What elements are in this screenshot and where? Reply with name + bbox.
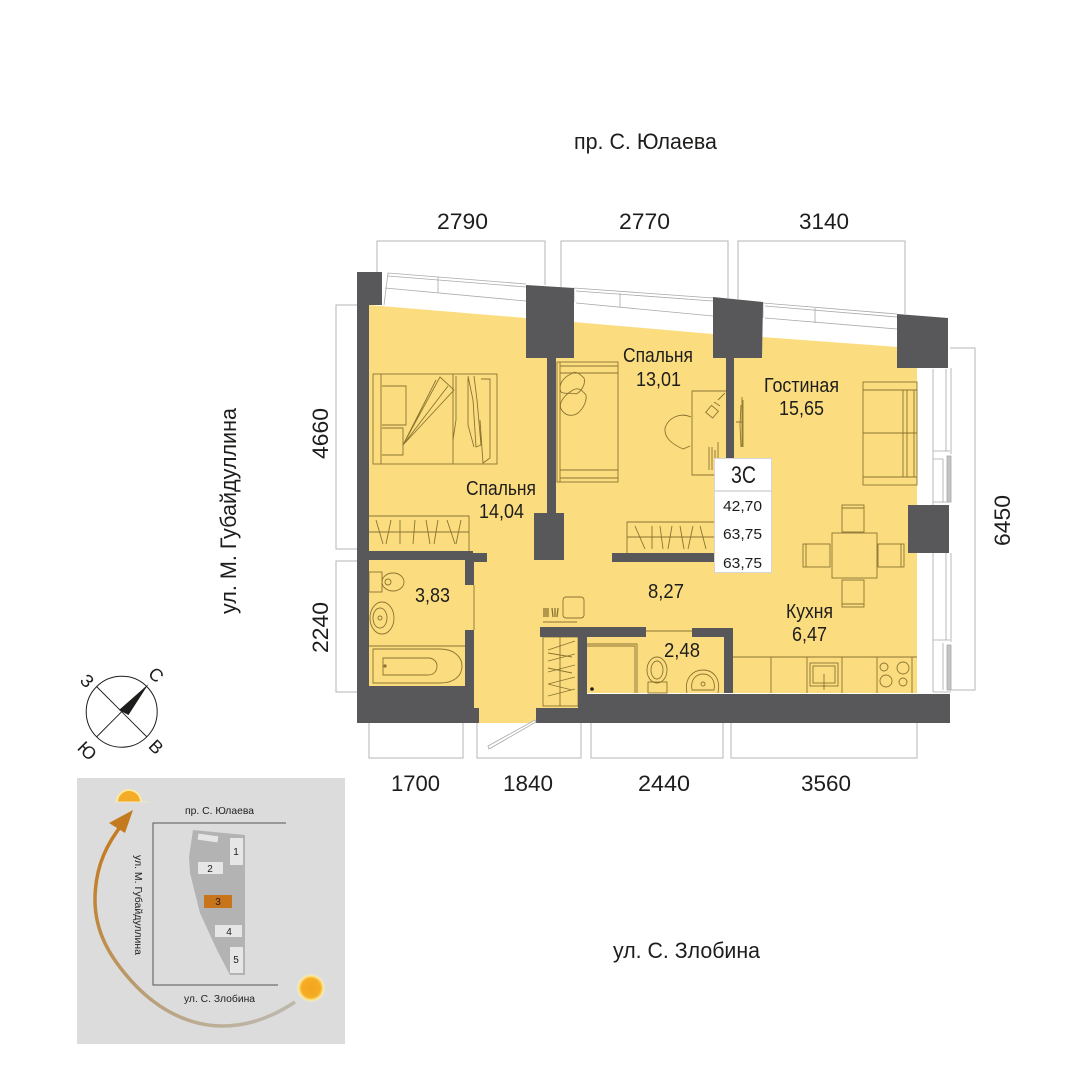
apartment info card: 63,75 (723, 555, 762, 572)
windows (384, 273, 951, 692)
site street names: пр. С. Юлаева (185, 805, 254, 817)
furniture: double bed (373, 374, 497, 464)
compass: З (76, 670, 98, 692)
icon: sunset sun (114, 789, 148, 802)
room label: kitchen: Кухня (786, 601, 833, 623)
icon: sunrise sun (297, 974, 325, 1002)
panel: site plan (77, 778, 345, 1044)
apartment info card (714, 458, 772, 572)
entry door (488, 720, 536, 749)
furniture: hallway wardrobe (543, 637, 578, 706)
room label: kitchen (786, 601, 833, 646)
room label: bedroom 2: Спальня (623, 345, 693, 367)
room label: bedroom 1 (466, 478, 536, 523)
street label: west: ул. М. Губайдуллина (216, 407, 241, 614)
room label: hallway area: 8,27 (648, 581, 684, 603)
room label: bedroom 1: 14,04 (479, 501, 524, 523)
site street names: ул. С. Злобина (184, 993, 255, 1005)
room label: bedroom 1: Спальня (466, 478, 536, 500)
site street names (132, 805, 255, 1005)
dimensions: 1700 (391, 771, 440, 796)
furniture: bedroom wardrobe (369, 516, 469, 551)
furniture: single bed (557, 362, 618, 482)
dimensions: 3140 (799, 209, 849, 234)
compass: Ю (73, 737, 101, 765)
furniture: work desk and chair (665, 391, 726, 475)
apartment floor (369, 305, 917, 723)
site buildings: 3 (215, 897, 221, 908)
street label: north: пр. С. Юлаева (574, 129, 718, 154)
site territory (189, 830, 245, 975)
apartment info card: 3С (731, 462, 756, 489)
sun path arrow (95, 810, 295, 1026)
room label: living room (764, 375, 839, 420)
site buildings: 2 (207, 864, 213, 875)
room label: kitchen: 6,47 (792, 624, 827, 646)
furniture: kitchen units (733, 657, 917, 693)
room label: living room: Гостиная (764, 375, 839, 397)
compass: В (145, 736, 167, 758)
dimensions: 2790 (437, 209, 488, 234)
dimensions: 1840 (503, 771, 553, 796)
furniture: toilet room fixtures (474, 585, 719, 693)
site street names: ул. М. Губайдуллина (132, 855, 144, 955)
furniture: wall TV (736, 397, 743, 447)
site buildings (198, 834, 243, 973)
dimensions: 4660 (308, 408, 333, 459)
room label: toilet area: 2,48 (664, 640, 700, 662)
walls (357, 272, 950, 723)
site streets (153, 823, 286, 985)
street label: south: ул. С. Злобина (613, 938, 761, 963)
site buildings: 4 (226, 927, 232, 938)
dimensions: 2440 (638, 771, 690, 796)
room label: bedroom 2: 13,01 (636, 369, 681, 391)
room label: bedroom 2 (623, 345, 693, 391)
furniture: dining table with chairs (803, 505, 904, 607)
furniture: washing machine and hangers (543, 597, 584, 622)
apartment info card: 63,75 (723, 526, 762, 543)
dimensions: 2770 (619, 209, 670, 234)
site buildings: 1 (233, 847, 239, 858)
dimension guide lines (336, 241, 975, 758)
apartment info card: 42,70 (723, 498, 762, 515)
dimensions: 2240 (308, 602, 333, 653)
furniture: bathroom fixtures (369, 572, 465, 683)
furniture: sofa (863, 382, 917, 485)
compass: С (144, 663, 168, 687)
compass (73, 663, 168, 765)
site buildings: 5 (233, 955, 239, 966)
room label: bathroom area: 3,83 (415, 585, 450, 607)
dimensions (308, 209, 1015, 796)
furniture: second wardrobe (627, 522, 714, 553)
room label: living room: 15,65 (779, 398, 824, 420)
dimensions: 3560 (801, 771, 851, 796)
dimensions: 6450 (990, 495, 1015, 546)
